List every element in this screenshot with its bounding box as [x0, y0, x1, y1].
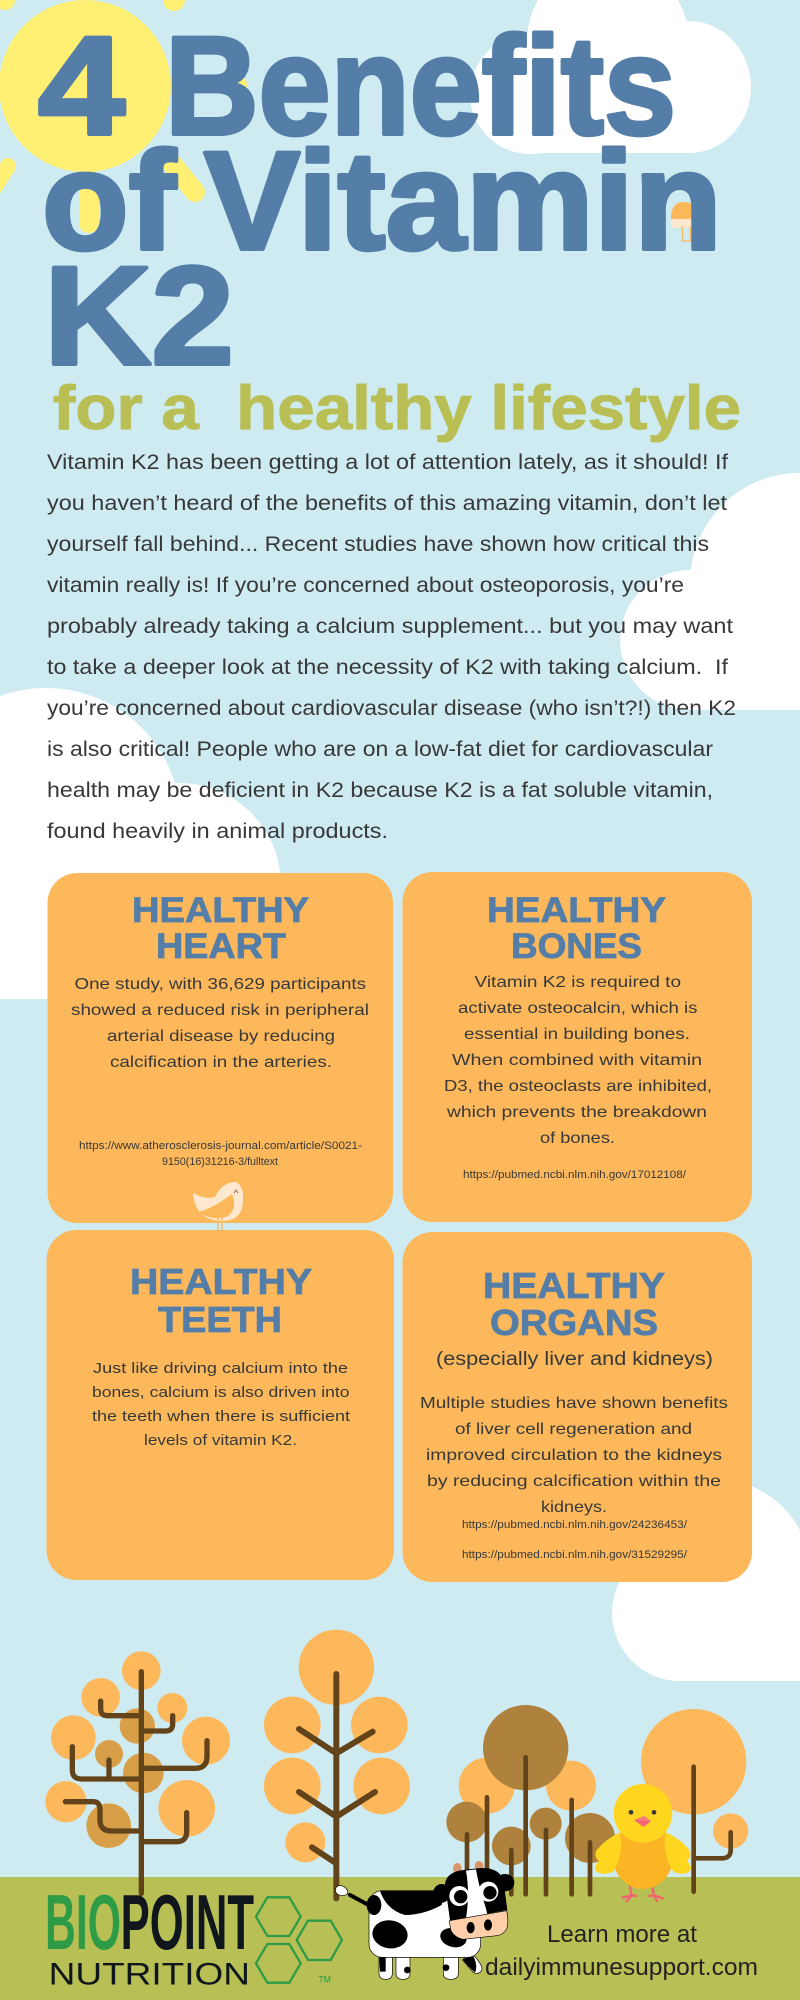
panel: healthy bones	[402, 872, 752, 1222]
sources: healthy organs: https://pubmed.ncbi.nlm.nih.gov/31529295/	[462, 1549, 688, 1561]
heading: healthy organs	[483, 1265, 665, 1343]
logo: biopoint nutrition: BIO	[45, 1880, 121, 1966]
heading: healthy teeth	[130, 1261, 312, 1340]
text: healthy teeth body: bones, calcium is also driven into	[92, 1384, 350, 1401]
panel: healthy heart	[48, 873, 393, 1223]
title: Benefits	[165, 7, 676, 164]
heading: healthy heart	[132, 891, 309, 966]
cloud: top right	[470, 0, 751, 154]
text: healthy organs body	[420, 1395, 728, 1516]
source: healthy bones: https://pubmed.ncbi.nlm.nih.gov/17012108/	[463, 1169, 687, 1181]
panel: healthy teeth	[46, 1230, 394, 1580]
text: healthy heart body: calcification in the arteries.	[110, 1054, 332, 1071]
text: healthy organs body: Multiple studies have shown benefits	[420, 1395, 728, 1412]
intro paragraph: found heavily in animal products.	[47, 820, 388, 843]
text: healthy heart body: One study, with 36,629 participants	[74, 976, 366, 993]
cloud: middle right	[620, 473, 800, 710]
source: healthy heart	[79, 1140, 362, 1168]
icon: sun	[0, 0, 238, 223]
text: healthy heart body	[71, 976, 369, 1071]
intro paragraph: to take a deeper look at the necessity of K2 with taking calcium. If	[47, 656, 728, 679]
tree: branching centre	[264, 1630, 410, 1898]
text: healthy bones body: D3, the osteoclasts are inhibited,	[444, 1078, 712, 1095]
heading: healthy heart: HEART	[156, 927, 286, 966]
text: healthy heart body: arterial disease by reducing	[107, 1028, 335, 1045]
source: healthy heart: https://www.atherosclerosis-journal.com/article/S0021-	[79, 1140, 362, 1152]
icon: chick	[595, 1784, 691, 1901]
title: Vitamin	[204, 122, 722, 279]
intro paragraph: Vitamin K2 has been getting a lot of attention lately, as it should! If	[47, 451, 728, 474]
intro paragraph: you haven’t heard of the benefits of this amazing vitamin, don’t let	[47, 492, 727, 515]
intro paragraph: yourself fall behind... Recent studies have shown how critical this	[47, 533, 709, 556]
icon: cow	[335, 1861, 514, 1979]
cloud: bottom right	[612, 1479, 800, 1681]
text: healthy teeth body: Just like driving calcium into the	[93, 1360, 348, 1377]
text: healthy bones body: which prevents the breakdown	[446, 1104, 707, 1121]
text: healthy organs body: of liver cell regeneration and	[455, 1421, 692, 1438]
tree: branching left	[45, 1651, 230, 1893]
subtitle: for a healthy lifestyle	[53, 374, 741, 443]
heading: healthy heart: HEALTHY	[132, 891, 309, 930]
intro paragraph: is also critical! People who are on a low-fat diet for cardiovascular	[47, 738, 713, 761]
call to action	[485, 1921, 758, 1981]
logo: biopoint nutrition: TM	[318, 1974, 331, 1984]
text: healthy bones body: When combined with vitamin	[452, 1052, 702, 1069]
text: healthy teeth body: levels of vitamin K2.	[144, 1432, 297, 1449]
subheading: healthy organs: (especially liver and kidneys)	[436, 1349, 713, 1370]
call to action: dailyimmunesupport.com	[485, 1954, 758, 1981]
logo: biopoint nutrition: POINT	[121, 1880, 254, 1966]
title: K2	[44, 237, 234, 394]
text: healthy bones body: essential in building bones.	[464, 1026, 690, 1043]
icon: bird on card	[193, 1182, 243, 1230]
source: healthy heart: 9150(16)31216-3/fulltext	[162, 1156, 278, 1168]
text: healthy organs body: improved circulation to the kidneys	[426, 1447, 722, 1464]
intro paragraph: vitamin really is! If you’re concerned about osteoporosis, you’re	[47, 574, 684, 597]
text: healthy bones body: Vitamin K2 is required to	[474, 974, 681, 991]
trees: grove right	[446, 1705, 748, 1894]
heading: healthy teeth: TEETH	[158, 1299, 282, 1340]
text: healthy bones body	[444, 974, 712, 1147]
intro paragraph: probably already taking a calcium supplement... but you may want	[47, 615, 733, 638]
logo: biopoint nutrition: NUTRITION	[49, 1955, 250, 1991]
panel: healthy organs	[402, 1232, 752, 1582]
heading: healthy bones: BONES	[511, 927, 642, 966]
title: 4	[38, 7, 125, 164]
text: healthy bones body: of bones.	[540, 1130, 615, 1147]
text: healthy heart body: showed a reduced risk in peripheral	[71, 1002, 369, 1019]
text: healthy organs body: by reducing calcification within the	[427, 1473, 721, 1490]
sources: healthy organs	[462, 1519, 688, 1561]
heading: healthy organs: ORGANS	[490, 1302, 658, 1343]
intro paragraph: you’re concerned about cardiovascular disease (who isn’t?!) then K2	[47, 697, 736, 720]
text: healthy teeth body	[92, 1360, 351, 1449]
call to action: Learn more at	[547, 1921, 697, 1948]
title	[38, 7, 722, 394]
logo: biopoint nutrition	[45, 1880, 342, 1991]
text: healthy organs body: kidneys.	[541, 1499, 607, 1516]
heading: healthy bones	[487, 891, 666, 966]
heading: healthy bones: HEALTHY	[487, 891, 666, 930]
text: healthy teeth body: the teeth when there is sufficient	[92, 1408, 351, 1425]
title: of	[42, 122, 176, 279]
heading: healthy teeth: HEALTHY	[130, 1261, 312, 1302]
sources: healthy organs: https://pubmed.ncbi.nlm.nih.gov/24236453/	[462, 1519, 688, 1531]
cloud: middle left	[0, 688, 281, 999]
text: healthy bones body: activate osteocalcin, which is	[458, 1000, 698, 1017]
intro paragraph	[47, 451, 736, 843]
intro paragraph: health may be deficient in K2 because K2 is a fat soluble vitamin,	[47, 779, 713, 802]
icon: small bird behind title	[671, 202, 696, 241]
heading: healthy organs: HEALTHY	[483, 1265, 665, 1306]
ground	[0, 1877, 800, 2000]
